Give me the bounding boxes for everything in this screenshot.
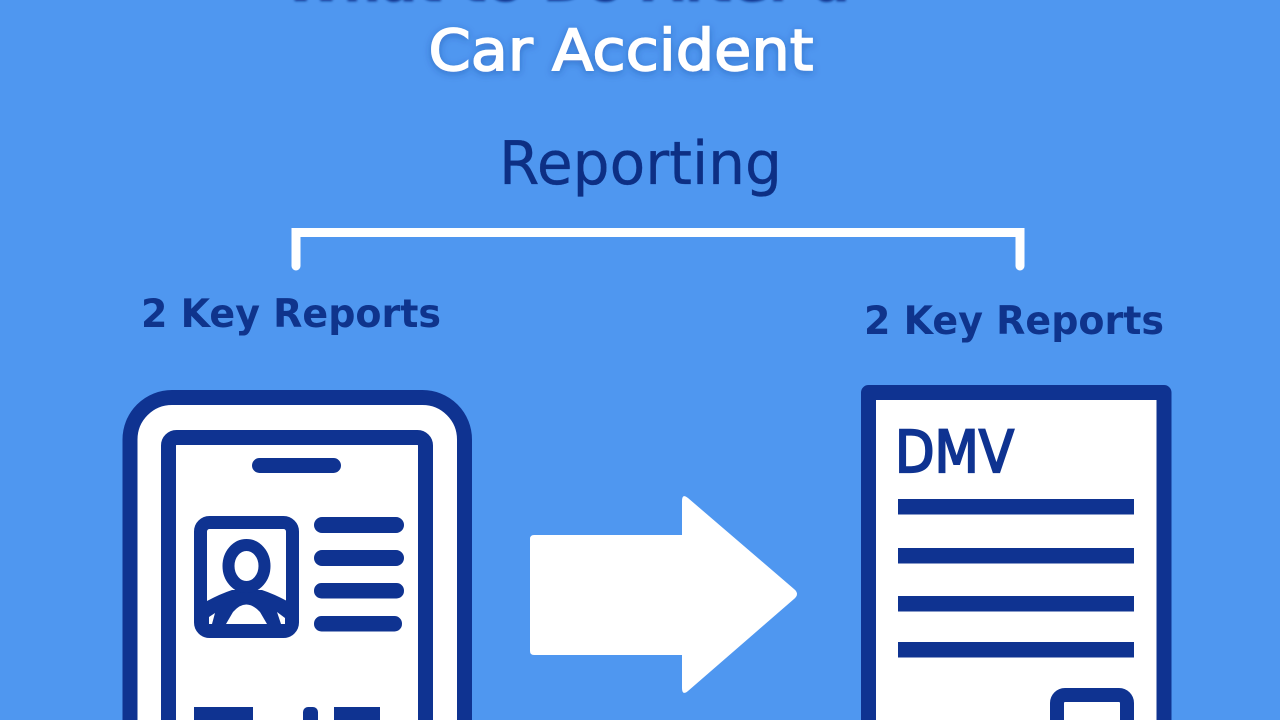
arrow: phone to DMV <box>530 496 797 693</box>
title: Car Accident: Car Accident <box>428 18 814 84</box>
lower phone content blocks <box>194 707 380 720</box>
document text lines <box>898 499 1134 658</box>
document sheet <box>868 392 1164 720</box>
label: right 2 Key Reports: 2 Key Reports <box>864 299 1164 344</box>
ID photo with person <box>200 522 292 632</box>
icon: phone with digital ID <box>130 398 464 720</box>
phone outer body <box>130 398 464 720</box>
label: left 2 Key Reports: 2 Key Reports <box>141 292 441 337</box>
heading: Reporting: Reporting <box>499 129 782 199</box>
icon: DMV document <box>868 392 1164 720</box>
phone speaker <box>252 458 341 473</box>
document label DMV: DMV <box>895 418 1014 486</box>
bracket connector <box>296 232 1020 266</box>
ID text lines <box>314 517 404 632</box>
phone screen <box>168 438 426 720</box>
document stamp box <box>1057 695 1127 720</box>
